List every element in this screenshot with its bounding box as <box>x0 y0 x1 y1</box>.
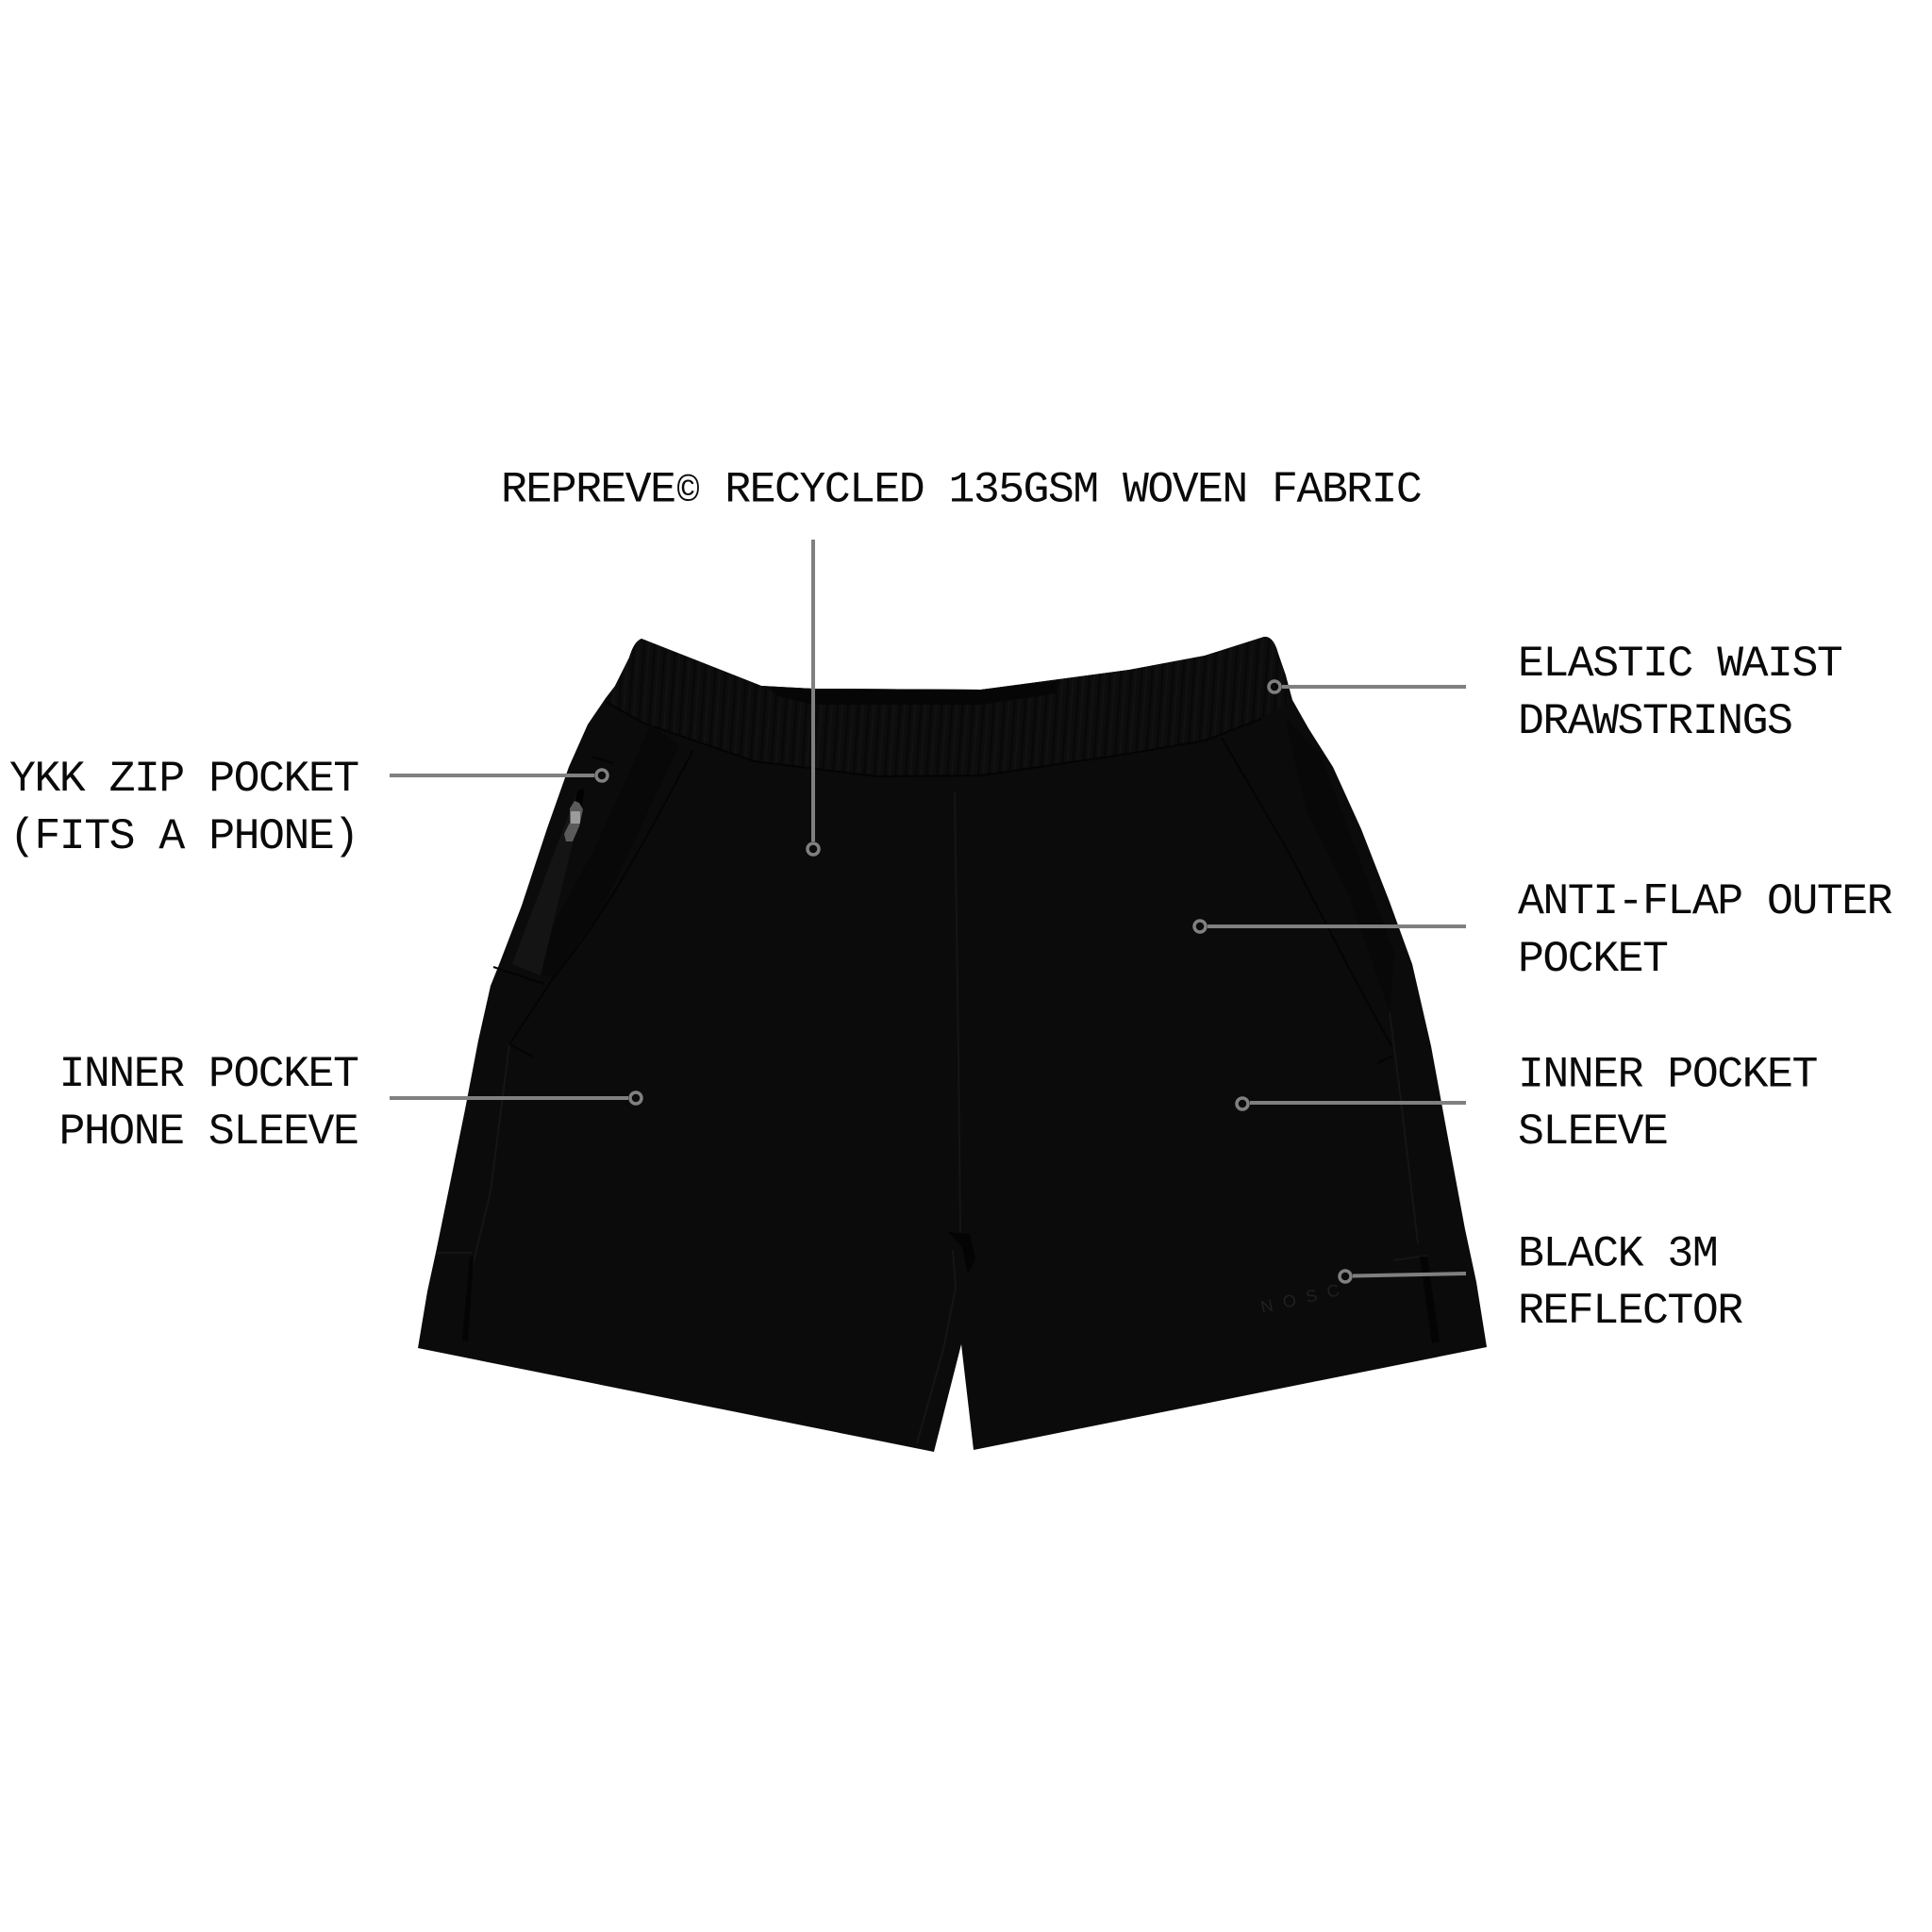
product photo: black shorts <box>418 637 1487 1452</box>
label: reflector <box>1518 1228 1742 1336</box>
reflector logo: NOSC <box>1258 1278 1351 1317</box>
callout: elastic waist <box>1269 639 1842 746</box>
leader: elastic waist <box>1269 681 1466 692</box>
label: reflector: BLACK 3M <box>1518 1228 1717 1279</box>
label: elastic waist <box>1518 639 1842 746</box>
callout: anti-flap pocket <box>1194 876 1892 984</box>
leader: zip pocket <box>390 770 608 781</box>
leader: inner pocket sleeve <box>1237 1098 1466 1109</box>
label: inner pocket sleeve <box>1518 1049 1817 1157</box>
leader: reflector <box>1340 1271 1466 1282</box>
callout: fabric <box>501 464 1421 855</box>
callout: reflector <box>1340 1228 1742 1336</box>
label: zip pocket <box>9 754 358 861</box>
shorts silhouette <box>418 637 1487 1452</box>
center fly seam and crotch notch <box>917 792 975 1443</box>
label: inner phone sleeve: INNER POCKET <box>58 1049 358 1099</box>
label: inner pocket sleeve: SLEEVE <box>1518 1107 1667 1157</box>
zip pocket with pull <box>493 757 613 984</box>
label: anti-flap pocket <box>1518 876 1892 984</box>
elastic waistband <box>606 637 1289 776</box>
label: zip pocket: (FITS A PHONE) <box>9 811 358 861</box>
label: anti-flap pocket: POCKET <box>1518 934 1668 984</box>
right pocket panel and seams <box>1222 717 1427 1260</box>
leader: fabric <box>808 540 819 855</box>
callout: inner phone sleeve <box>58 1049 641 1157</box>
label: zip pocket: YKK ZIP POCKET <box>9 754 358 804</box>
left pocket panel and seams <box>471 724 693 1274</box>
label: inner pocket sleeve: INNER POCKET <box>1518 1049 1817 1100</box>
leader: anti-flap pocket <box>1194 921 1466 932</box>
label: reflector: REFLECTOR <box>1518 1286 1742 1336</box>
label: inner phone sleeve: PHONE SLEEVE <box>58 1107 358 1157</box>
leader: inner phone sleeve <box>390 1092 641 1104</box>
waistband top shadow <box>766 681 1057 705</box>
label: anti-flap pocket: ANTI-FLAP OUTER <box>1518 876 1892 926</box>
label: elastic waist: DRAWSTRINGS <box>1518 696 1791 746</box>
leg hem slits <box>437 1253 1440 1343</box>
label: fabric: REPREVE© RECYCLED 135GSM WOVEN FABRIC <box>501 464 1421 515</box>
label: inner phone sleeve <box>58 1049 358 1157</box>
callout: inner pocket sleeve <box>1237 1049 1817 1157</box>
callout: zip pocket <box>9 754 608 861</box>
label: elastic waist: ELASTIC WAIST <box>1518 639 1842 689</box>
waistband bottom seam <box>606 702 1261 776</box>
